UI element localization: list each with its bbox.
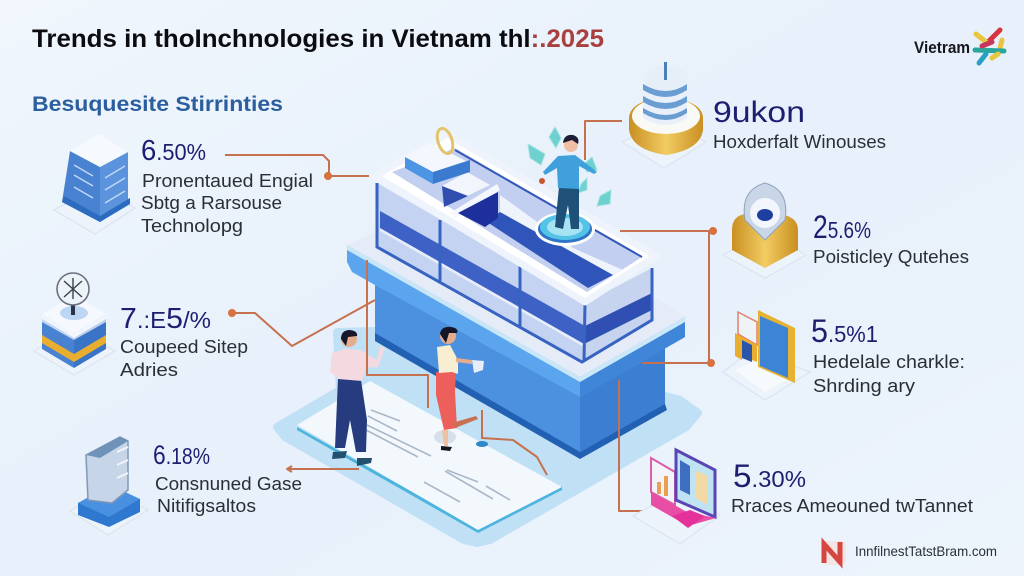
stat and label [813,209,969,267]
item: right 3 [723,310,965,400]
item: right 1 [622,62,886,168]
title: Trends in thoInchnologies in Vietnam thl :.2025 [32,25,604,53]
base plate [277,330,698,543]
icon: books and tablet [723,310,810,400]
section heading: Besuquesite Stirrinties [32,93,283,116]
stat and label: Coupeed Sitep [120,337,248,357]
stat and label: Nitifigsaltos [157,496,256,516]
torso and arms [543,155,597,189]
platform [535,212,595,246]
stat and label: 9ukon [713,96,805,129]
footer logo mark [822,541,846,565]
ledge [347,232,685,397]
legs [555,187,579,229]
item: left 3 [70,437,302,535]
stat and label [713,96,886,152]
stat and label: 5.5%1 [811,313,878,349]
person in red trousers [434,327,484,451]
stat and label: Consnuned Gase [155,474,302,494]
roof frame and interior [375,134,656,302]
stat and label: Sbtg a Rarsouse [141,193,282,213]
stat and label [153,440,302,516]
stat and label: Rraces Ameouned twTannet [731,496,973,516]
footer logo and URL: InnfilnestTatstBram.com [855,543,997,559]
stat and label: 5.30% [733,458,806,494]
icon: monitor dashboard [633,450,720,544]
stat and label: 25.6% [813,209,871,245]
paper sheet on base plate [297,381,562,533]
logo: Vietnam mark [914,30,1004,63]
leaves [528,127,611,206]
item: right 4 [633,450,973,544]
person on platform with leaves [528,127,611,246]
stat and label: 6.18% [153,440,210,470]
connector lines [225,121,717,511]
stat and label: 7.:E5/% [120,303,211,335]
footer logo and URL [822,541,997,565]
central illustration: isometric building [277,126,698,543]
item: left 1 [54,134,313,236]
icon: server building [54,134,135,234]
lower block [375,285,667,459]
icon: glass tower on blue base [70,437,148,535]
stat and label [120,303,248,380]
stat and label [141,135,313,236]
logo: Vietnam mark: Vietram [914,38,970,57]
stat and label: Hedelale charkle: [813,352,965,372]
stat and label: Pronentaued Engial [142,171,313,191]
icon: striped cylinder on gold ring [622,62,706,168]
stat and label: Poisticley Qutehes [813,247,969,267]
small base marker [476,441,488,447]
item: left 2 [34,273,248,380]
stat and label: Hoxderfalt Winouses [713,132,886,152]
icon: lens on gold base [723,183,806,278]
stat and label: 6.50% [141,135,206,167]
roof block with gold ring [405,126,470,184]
item: right 2 [723,183,969,278]
stat and label: Adries [120,360,178,380]
icon: layered stack with dial [34,273,115,375]
person in pink shirt [330,330,385,466]
glass body [377,183,652,362]
stat and label: Technolopg [141,216,243,236]
stat and label [731,458,973,516]
head [564,138,578,152]
stat and label [811,313,965,396]
stat and label: Shrding ary [813,376,915,396]
